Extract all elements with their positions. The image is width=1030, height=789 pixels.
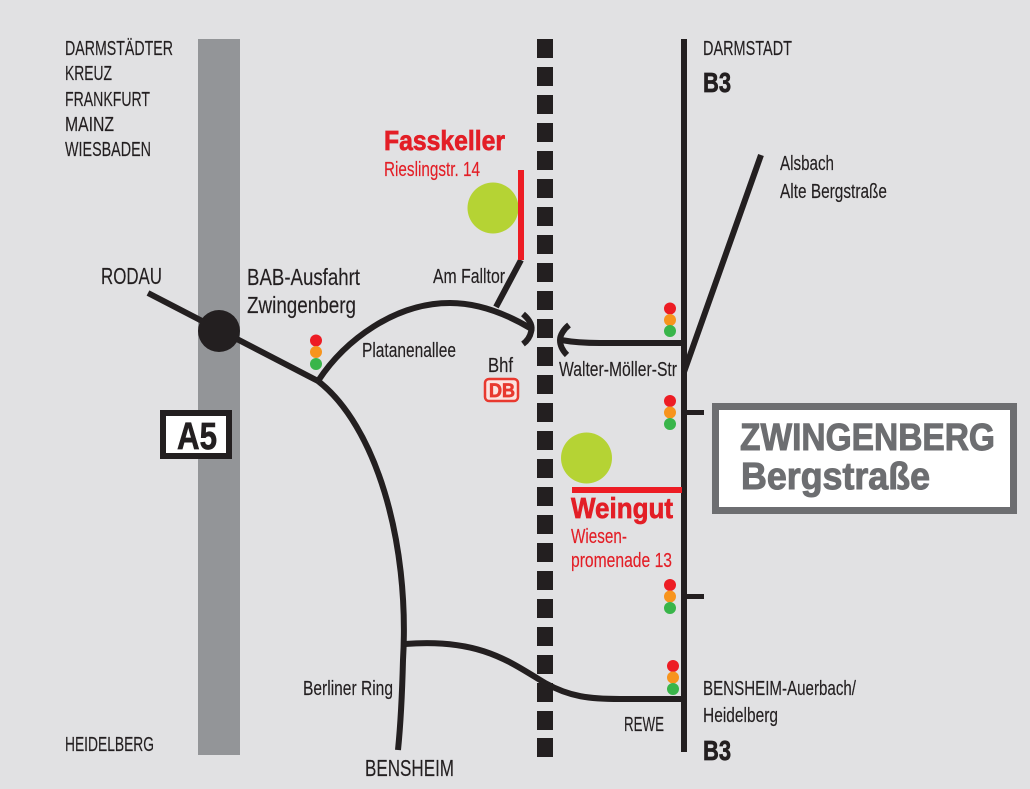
motorway A5 band [198, 39, 240, 755]
road to Alsbach [684, 155, 761, 372]
road to Bensheim [318, 381, 404, 750]
label: Bensheim-Auerbach: Heidelberg [703, 705, 778, 727]
road B3 [681, 39, 687, 752]
label: Am Falltor: Am Falltor [433, 266, 505, 288]
label: Weingut address [571, 493, 673, 572]
label: Bhf: Bhf [488, 355, 513, 377]
label: Darmstadt: DARMSTADT [703, 38, 792, 60]
label: BAB exit [247, 264, 360, 318]
label: Fasskeller address [384, 125, 505, 181]
label: Alsbach [780, 153, 887, 203]
label: Weingut address: Weingut [571, 493, 673, 525]
label: Bensheim-Auerbach: BENSHEIM-Auerbach/ [703, 678, 856, 700]
destinations: north-west: KREUZ [65, 63, 112, 85]
traffic light: Walter-Möller-Str [664, 302, 676, 337]
town sign [716, 406, 1014, 510]
destinations: north-west: FRANKFURT [65, 89, 150, 111]
destinations: north-west [65, 38, 173, 161]
A5 motorway sign: A5 [177, 416, 217, 458]
traffic light: REWE [667, 660, 679, 695]
label: B3 north: B3 [703, 67, 731, 98]
label: Platanenallee: Platanenallee [362, 340, 456, 362]
label: Bensheim-Auerbach [703, 678, 856, 727]
label: Berliner Ring: Berliner Ring [303, 678, 393, 700]
label: Heidelberg: HEIDELBERG [65, 734, 154, 756]
road from Rodau to A5 exit [148, 293, 318, 381]
Fasskeller location marker [468, 170, 524, 260]
Am Falltor road [496, 260, 521, 307]
label: Alsbach: Alsbach [780, 153, 834, 175]
DB station logo: DB [489, 381, 515, 402]
B3 side ticks [687, 410, 704, 599]
label: Walter-Möller-Str: Walter-Möller-Str [559, 359, 677, 381]
label: Fasskeller address: Fasskeller [384, 125, 505, 156]
Platanenallee road with arrow [318, 303, 532, 381]
traffic light: south [664, 579, 676, 614]
label: Fasskeller address: Rieslingstr. 14 [384, 159, 480, 181]
label: Alsbach: Alte Bergstraße [780, 181, 887, 203]
destinations: north-west: WIESBADEN [65, 139, 151, 161]
label: Weingut address: Wiesen- [571, 526, 627, 548]
Walter-Möller-Str road with arrow [560, 325, 681, 355]
label: BAB exit: BAB-Ausfahrt [247, 264, 360, 290]
traffic light: A5 exit [310, 334, 322, 370]
traffic light: centre [664, 395, 676, 430]
Berliner Ring road [405, 643, 681, 699]
label: Bensheim: BENSHEIM [365, 755, 454, 781]
motorway junction [198, 310, 240, 352]
town sign: Bergstraße [741, 456, 930, 498]
railway line [537, 39, 553, 757]
destinations: north-west: DARMSTÄDTER [65, 38, 173, 60]
label: Rodau: RODAU [101, 263, 162, 289]
Weingut location marker [561, 432, 682, 493]
A5 motorway sign [163, 413, 229, 458]
destinations: north-west: MAINZ [65, 114, 114, 136]
label: Weingut address: promenade 13 [571, 550, 672, 572]
town sign: ZWINGENBERG [740, 417, 995, 459]
label: REWE: REWE [624, 714, 664, 736]
label: BAB exit: Zwingenberg [247, 292, 356, 318]
label: B3 south: B3 [703, 735, 731, 766]
